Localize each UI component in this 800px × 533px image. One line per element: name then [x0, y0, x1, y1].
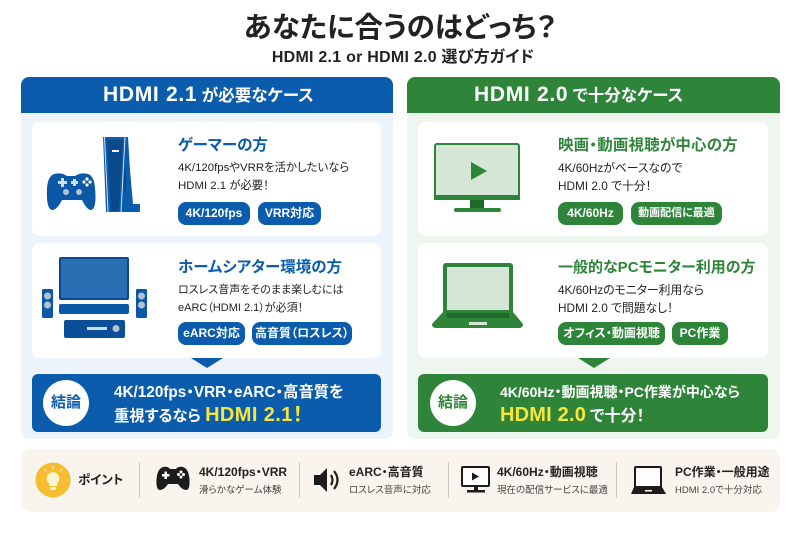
- point: audio: [314, 465, 431, 496]
- card: PC monitor: [418, 243, 768, 358]
- subtext: video: 現在の配信サービスに最適: [497, 485, 608, 496]
- heading: video: 映画・動画視聴が中心の方: [558, 137, 738, 154]
- description: gamer: HDMI 2.1 が必要！: [178, 180, 269, 192]
- heading: PC monitor: 一般的なPCモニター利用の方: [558, 259, 756, 276]
- icon: laptop: [631, 466, 666, 494]
- tag: eARC: eARC対応: [183, 326, 240, 340]
- panel heading: HDMI 2.0: [407, 77, 780, 113]
- panel heading: HDMI 2.1: [21, 77, 393, 113]
- conclusion text: HDMI 2.0 で十分！: [500, 404, 644, 426]
- panel heading: HDMI 2.1: HDMI 2.1 が必要なケース: [103, 83, 314, 106]
- tag: PC: PC作業: [680, 326, 720, 340]
- badge: conclusion: [43, 380, 89, 426]
- tag: 4K/120fps: 4K/120fps: [186, 206, 242, 220]
- badge: conclusion: 結論: [438, 394, 468, 411]
- conclusion text: 4K/120fps・VRR・eARC・高音質を: [114, 384, 344, 401]
- tag: streaming: [631, 202, 722, 225]
- tag: PC: [672, 322, 728, 345]
- heading: home theater: ホームシアター環境の方: [178, 259, 342, 276]
- conclusion text: [500, 384, 740, 426]
- conclusion text: 重視するなら HDMI 2.1！: [114, 404, 303, 426]
- description: gamer: 4K/120fpsやVRRを活かしたいなら: [178, 162, 349, 174]
- card: gamer: [32, 122, 381, 236]
- card: video: [418, 122, 768, 236]
- panel heading: HDMI 2.0: HDMI 2.0 で十分なケース: [474, 83, 683, 106]
- subtext: gaming: 滑らかなゲーム体験: [199, 485, 281, 496]
- description: PC monitor: 4K/60Hzのモニター利用なら: [558, 283, 704, 297]
- panel: HDMI 2.0: [407, 77, 780, 439]
- text: audio: eARC・高音質: [349, 465, 424, 479]
- tag: lossless: 高音質（ロスレス）: [255, 326, 349, 340]
- badge: conclusion: 結論: [51, 394, 81, 411]
- description: home theater: [178, 284, 344, 314]
- icon: laptop: [432, 263, 523, 328]
- badge: conclusion: [430, 380, 476, 426]
- tag: 4K/60Hz: 4K/60Hz: [567, 206, 614, 220]
- icon: game controller and console: [46, 137, 140, 212]
- description: gamer: [178, 161, 349, 192]
- conclusion text: [114, 384, 344, 426]
- icon: controller: [156, 466, 190, 490]
- description: video: HDMI 2.0 で十分！: [558, 178, 652, 192]
- icon: monitor with play button: [434, 143, 520, 212]
- point: video: [461, 465, 608, 496]
- conclusion: HDMI 2.0: [418, 374, 768, 432]
- tag: eARC: [178, 322, 245, 345]
- subtext: PC: HDMI 2.0で十分対応: [675, 485, 762, 496]
- text: PC: PC作業・一般用途: [675, 465, 770, 479]
- arrow: to conclusion: [578, 358, 610, 368]
- subtitle: HDMI 2.1 or HDMI 2.0 選び方ガイド: [272, 49, 534, 66]
- text: video: 4K/60Hz・動画視聴: [497, 465, 598, 479]
- tag: 4K/120fps: [178, 202, 250, 225]
- tag: 4K/60Hz: [558, 202, 623, 225]
- footer band: points: [21, 449, 780, 512]
- description: video: [558, 161, 682, 192]
- point: PC: [631, 465, 770, 496]
- conclusion: HDMI 2.1: [32, 374, 381, 432]
- tag: VRR: VRR対応: [265, 206, 314, 220]
- conclusion text: 4K/60Hz・動画視聴・PC作業が中心なら: [500, 384, 740, 400]
- tag: office: [558, 322, 665, 345]
- description: home theater: eARC（HDMI 2.1）が必須！: [178, 302, 303, 314]
- text: gaming: 4K/120fps・VRR: [199, 465, 287, 479]
- icon: speaker: [314, 468, 339, 492]
- panel: HDMI 2.1: [21, 77, 393, 439]
- title: あなたに合うのはどっち？: [244, 12, 556, 44]
- description: PC monitor: HDMI 2.0 で問題なし！: [558, 300, 673, 314]
- description: PC monitor: [558, 283, 704, 314]
- heading: gamer: ゲーマーの方: [178, 137, 268, 154]
- icon: light bulb: [36, 462, 70, 498]
- tag: lossless: [252, 322, 352, 345]
- label: point: ポイント: [78, 473, 123, 487]
- arrow: to conclusion: [191, 358, 223, 368]
- description: home theater: ロスレス音声をそのまま楽しむには: [178, 284, 344, 296]
- point: gaming: [156, 465, 287, 496]
- icon: monitor: [461, 466, 490, 492]
- tag: VRR: [258, 202, 321, 225]
- icon: home theater: [42, 257, 147, 338]
- tag: streaming: 動画配信に最適: [638, 207, 715, 219]
- description: video: 4K/60Hzがベースなので: [558, 161, 682, 175]
- subtext: audio: ロスレス音声に対応: [349, 485, 431, 496]
- tag: office: オフィス・動画視聴: [563, 326, 660, 340]
- card: home theater: [32, 243, 381, 358]
